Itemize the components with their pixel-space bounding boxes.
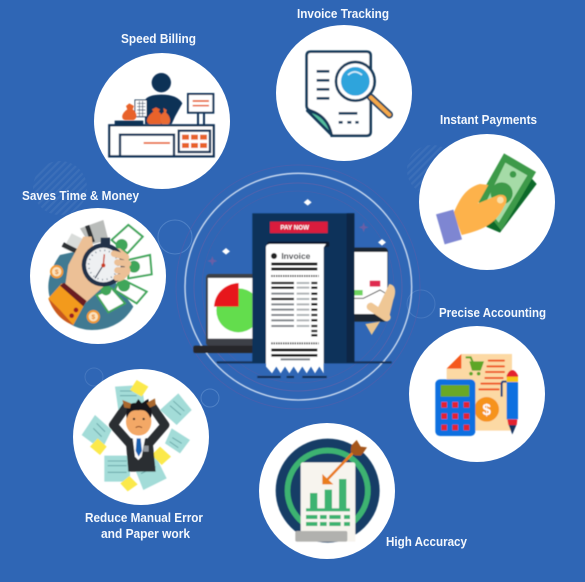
fingers <box>114 254 128 278</box>
decorative background rings and stripes <box>33 145 457 409</box>
icon: cashier at counter <box>109 73 214 156</box>
laptop with pie chart <box>193 274 260 353</box>
circle: speed billing <box>94 53 230 189</box>
panel: instant payments <box>419 112 555 270</box>
label: reduce manual error: Reduce Manual Error <box>85 510 203 525</box>
icon: target with report chart and arrow <box>276 439 380 543</box>
credit cards <box>62 220 108 256</box>
label: invoice tracking: Invoice Tracking <box>297 6 389 21</box>
central invoice illustration <box>185 173 412 400</box>
coins: $ <box>91 314 95 321</box>
label: precise accounting: Precise Accounting <box>439 305 546 320</box>
coins <box>50 265 100 323</box>
icon: hand holding banknotes <box>436 153 537 244</box>
circle: saves time and money <box>30 208 166 344</box>
label: instant payments: Instant Payments <box>440 112 537 127</box>
invoice receipt: Invoice <box>281 251 311 261</box>
dark payment panel <box>252 213 354 363</box>
label: saves time and money: Saves Time & Money <box>22 188 140 203</box>
main white ring <box>185 173 412 400</box>
floor line <box>217 362 392 377</box>
circle: high accuracy <box>259 423 395 559</box>
panel: high accuracy <box>259 423 468 559</box>
circle: instant payments <box>419 134 555 270</box>
circle: precise accounting <box>409 326 545 462</box>
icon: document with magnifier <box>307 52 389 136</box>
panel: invoice tracking <box>276 6 412 161</box>
phone with chart and hand <box>347 248 395 335</box>
coins: $ <box>55 269 59 276</box>
icon: stressed man with papers <box>82 380 192 491</box>
pay now button: PAY NOW <box>280 225 310 232</box>
banknotes <box>97 225 152 312</box>
stopwatch <box>82 238 125 287</box>
hand <box>65 237 130 303</box>
icon: calculator, invoice and pen: $ <box>482 402 491 419</box>
pay now button <box>270 222 328 233</box>
label: speed billing: Speed Billing <box>121 31 196 46</box>
panel: speed billing <box>94 31 230 189</box>
sparkles <box>207 199 386 266</box>
label: and paper work: and Paper work <box>101 526 191 541</box>
panel: precise accounting <box>409 305 546 462</box>
panel: reduce manual error <box>73 369 209 541</box>
circle: invoice tracking <box>276 25 412 161</box>
invoice receipt <box>266 244 326 373</box>
sleeve <box>48 283 85 325</box>
icon: hand with stopwatch and cash <box>48 220 152 330</box>
circle: reduce manual error <box>73 369 209 505</box>
icon: calculator, invoice and pen <box>435 354 518 436</box>
label: high accuracy: High Accuracy <box>386 534 468 549</box>
panel: saves time and money <box>22 188 166 344</box>
